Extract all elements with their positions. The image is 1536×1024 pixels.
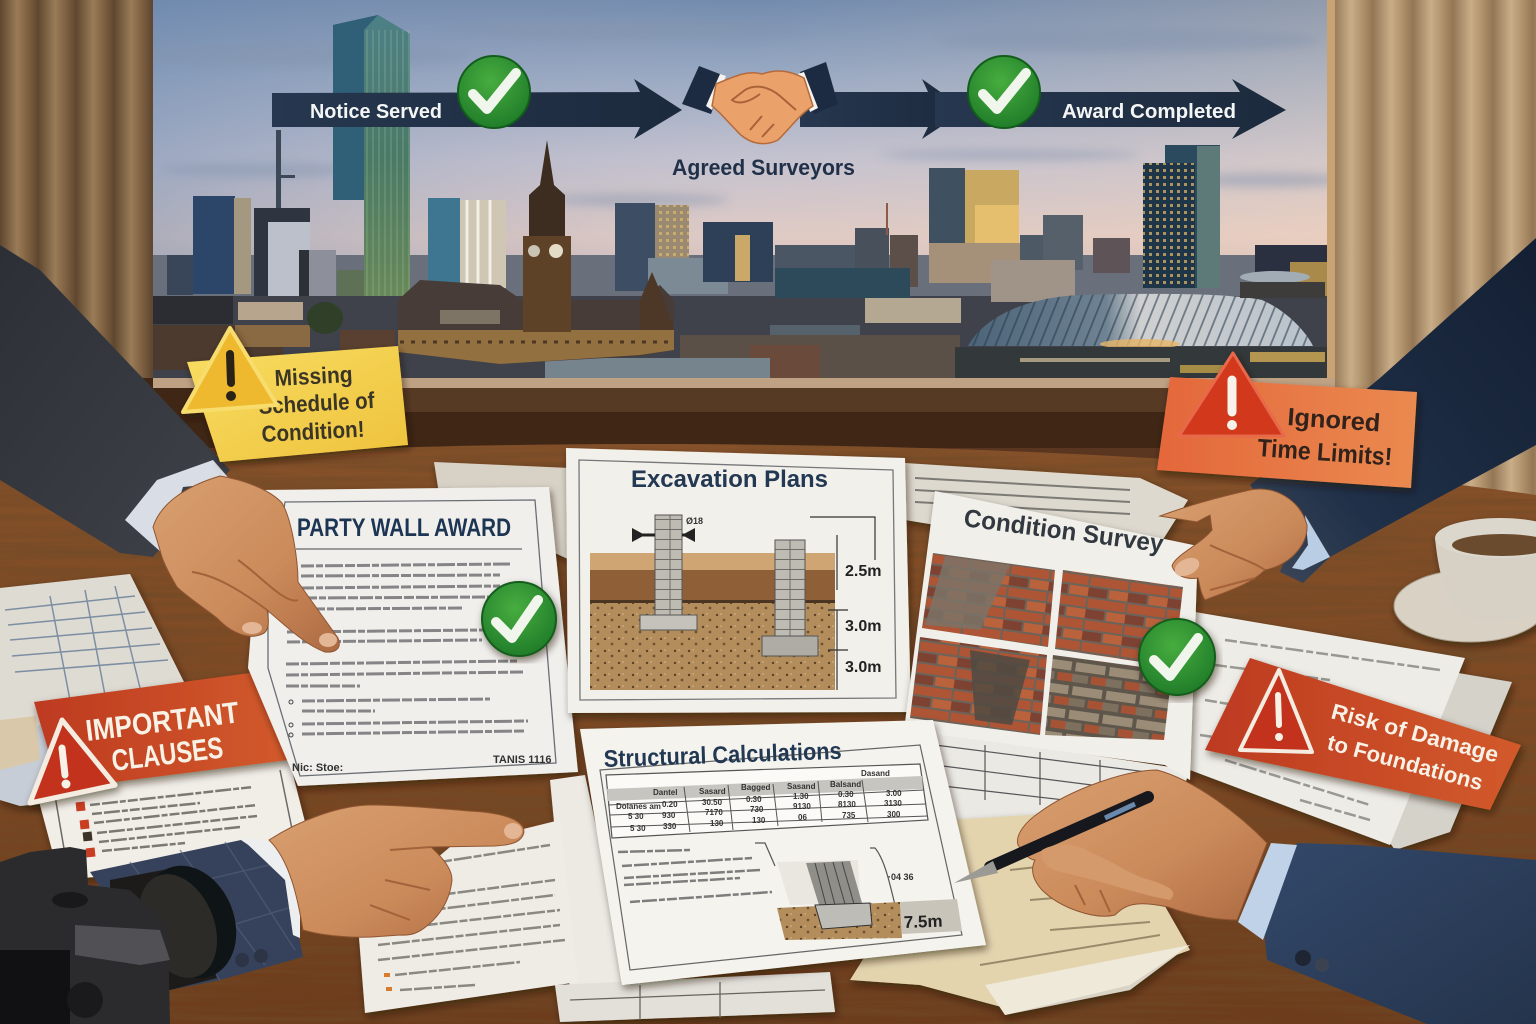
clause bullets bbox=[76, 787, 257, 857]
coffee cup and saucer bbox=[1394, 518, 1536, 642]
diagram: pier and footing bbox=[755, 843, 962, 940]
calculations table: 130 bbox=[710, 819, 724, 828]
icon: check badge, notice served bbox=[458, 56, 530, 128]
calculations table: 130 bbox=[752, 816, 766, 825]
lower right drawing papers bbox=[850, 810, 1190, 1015]
left paper stack with blueprint bbox=[0, 574, 187, 806]
diagram: foundations cross-section bbox=[590, 515, 881, 690]
calculations table bbox=[606, 764, 928, 838]
sticky note: ignored time limits: Time Limits! bbox=[1257, 434, 1393, 471]
window sill bbox=[0, 378, 1335, 448]
icon: warning triangle bbox=[1179, 353, 1284, 436]
calculations table: Sasand bbox=[787, 782, 816, 791]
sticky note: missing schedule of condition: Missing bbox=[274, 361, 353, 391]
pen bbox=[954, 797, 1148, 883]
arm: lower right, hand with pen bbox=[954, 770, 1536, 1024]
right curtain bbox=[1335, 0, 1536, 500]
heading: Excavation Plans bbox=[631, 466, 828, 493]
document: structural calculations bbox=[580, 720, 986, 985]
calculations table: 3.00 bbox=[886, 789, 902, 798]
banner: risk of damage to foundations: to Foundations bbox=[1325, 730, 1486, 795]
sticky note: ignored time limits: Ignored bbox=[1287, 403, 1381, 437]
icon: warning triangle bbox=[30, 720, 115, 803]
banner: important clauses: CLAUSES bbox=[110, 732, 225, 778]
calculations table: 330 bbox=[663, 822, 677, 831]
document: party wall award bbox=[248, 487, 578, 786]
icon: handshake bbox=[682, 62, 838, 144]
camera bbox=[0, 847, 253, 1024]
background papers, top bbox=[434, 462, 1188, 560]
lower left document bbox=[358, 775, 835, 1022]
calculations table: Dasand bbox=[861, 769, 890, 778]
banner: risk of damage to foundations bbox=[1205, 658, 1521, 810]
calculations table: Sasard bbox=[699, 787, 726, 796]
document: party wall award: TANIS 1116 bbox=[493, 754, 552, 766]
calculations table: 7170 bbox=[705, 808, 723, 817]
icon: warning triangle bbox=[183, 328, 277, 412]
calculations table: 930 bbox=[662, 811, 676, 820]
calculations table: 300 bbox=[887, 810, 901, 819]
calculations table: 730 bbox=[750, 805, 764, 814]
banner: important clauses: IMPORTANT bbox=[84, 696, 241, 748]
calculations table: 735 bbox=[842, 811, 856, 820]
calculations table: 1.30 bbox=[793, 792, 809, 801]
timeline arrow ribbon bbox=[272, 79, 1286, 180]
document: excavation plans bbox=[566, 448, 911, 713]
wooden table bbox=[0, 430, 1536, 1024]
sticky note: ignored time limits bbox=[1157, 353, 1417, 488]
calculations table: 9130 bbox=[793, 802, 811, 811]
sticky note: missing schedule of condition: Schedule of bbox=[258, 387, 375, 419]
calculations table: 3130 bbox=[884, 799, 902, 808]
photos: damaged brickwork bbox=[910, 553, 1183, 740]
heading: Condition Survey bbox=[962, 504, 1165, 558]
check badge: party wall award bbox=[482, 582, 556, 656]
right paper stack bbox=[1190, 612, 1512, 850]
calculations table: 0.30 bbox=[838, 790, 854, 799]
label: Notice Served: Notice Served bbox=[310, 101, 442, 123]
calculations table: Bagged bbox=[741, 783, 770, 792]
calculations table: Dantel bbox=[653, 788, 677, 797]
body text bbox=[286, 564, 528, 734]
banner: important clauses bbox=[30, 670, 288, 803]
heading: PARTY WALL AWARD bbox=[297, 514, 511, 542]
calculations table: 5 30 bbox=[630, 824, 646, 833]
check badge: condition survey bbox=[1139, 619, 1215, 695]
left curtain bbox=[0, 0, 153, 380]
calculations table: 0.30 bbox=[746, 795, 762, 804]
calculations table: 30.50 bbox=[702, 798, 723, 807]
document: party wall award: Nic: Stoe: bbox=[292, 762, 343, 774]
notes text bbox=[618, 850, 772, 902]
icon: warning triangle bbox=[1240, 670, 1312, 752]
skyline: Manchester city view bbox=[153, 0, 1335, 380]
diagram: foundations cross-section: 2.5m bbox=[845, 563, 881, 580]
document: important clauses bbox=[36, 755, 307, 880]
diagram: pier and footing: ·04 36 bbox=[888, 872, 914, 882]
document: condition survey bbox=[904, 491, 1198, 825]
arm: upper right, holding survey bbox=[1160, 238, 1536, 600]
diagram: foundations cross-section: 3.0m bbox=[845, 618, 881, 635]
calculations table: Dolanes am bbox=[616, 802, 661, 811]
sticky note: missing schedule of condition: Condition! bbox=[261, 416, 365, 447]
label: Award Completed: Award Completed bbox=[1062, 101, 1236, 123]
arm: lower left, pointing hand bbox=[90, 805, 524, 990]
diagram: foundations cross-section: 3.0m bbox=[845, 659, 881, 676]
banner: risk of damage to foundations: Risk of Damage bbox=[1329, 699, 1501, 767]
sticky note: missing schedule of condition bbox=[183, 328, 408, 462]
background: window sky bbox=[130, 0, 1350, 380]
calculations table: 0.20 bbox=[662, 800, 678, 809]
diagram: foundations cross-section: Ø18 bbox=[686, 516, 703, 526]
arm: upper left, pointing hand bbox=[0, 245, 339, 652]
icon: check badge, award completed bbox=[968, 56, 1040, 128]
calculations table: 5 30 bbox=[628, 812, 644, 821]
calculations table: Balsand bbox=[830, 780, 861, 789]
label: Agreed Surveyors: Agreed Surveyors bbox=[672, 155, 855, 180]
diagram: pier and footing: 7.5m bbox=[903, 912, 943, 932]
calculations table: 8130 bbox=[838, 800, 856, 809]
heading: Structural Calculations bbox=[603, 738, 842, 773]
calculations table: 06 bbox=[798, 813, 807, 822]
